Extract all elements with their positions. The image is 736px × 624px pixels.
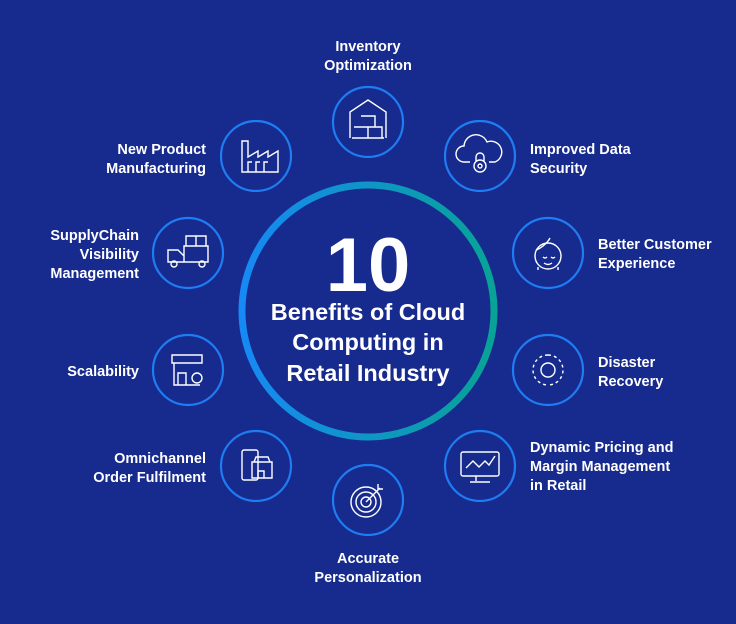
label: accurate personalization: Accurate bbox=[337, 551, 399, 567]
icon: warehouse bbox=[350, 100, 386, 138]
label: supply chain: SupplyChain bbox=[50, 228, 139, 244]
icon: target bbox=[351, 484, 383, 517]
icon circle: disaster bbox=[513, 335, 583, 405]
label: supply chain: Management bbox=[50, 266, 139, 282]
label: new product manufacturing bbox=[106, 142, 206, 177]
icon: face bbox=[535, 238, 561, 270]
title text: Benefits of Cloud bbox=[271, 299, 465, 325]
icon: store gear bbox=[172, 355, 202, 385]
icon circle: inventory bbox=[333, 87, 403, 157]
icon circle: manufacturing bbox=[221, 121, 291, 191]
icon: disaster recovery gear bbox=[533, 355, 563, 385]
label: omnichannel bbox=[93, 451, 206, 486]
label: inventory optimization: Inventory bbox=[335, 39, 401, 55]
label: accurate personalization: Personalization bbox=[314, 570, 422, 586]
label: supply chain bbox=[50, 228, 139, 282]
center ring bbox=[242, 185, 494, 437]
label: better customer experience: Experience bbox=[598, 256, 675, 272]
label: supply chain: Visibility bbox=[80, 247, 139, 263]
label: disaster recovery: Disaster bbox=[598, 355, 655, 371]
icon: monitor chart bbox=[461, 452, 499, 482]
label: dynamic pricing: Dynamic Pricing and bbox=[530, 440, 673, 456]
label: omnichannel: Order Fulfilment bbox=[93, 470, 206, 486]
label: new product manufacturing: Manufacturing bbox=[106, 161, 206, 177]
icon: factory bbox=[242, 141, 278, 172]
title text bbox=[271, 299, 465, 386]
icon circle: data security bbox=[445, 121, 515, 191]
icon circle: supply chain bbox=[153, 218, 223, 288]
title text: Computing in bbox=[292, 329, 444, 355]
label: scalability: Scalability bbox=[67, 364, 139, 380]
label: improved data security: Improved Data bbox=[530, 142, 631, 158]
label: improved data security bbox=[530, 142, 631, 177]
label: disaster recovery: Recovery bbox=[598, 374, 663, 390]
icon circle: omnichannel bbox=[221, 431, 291, 501]
label: better customer experience: Better Customer bbox=[598, 237, 712, 253]
label: inventory optimization bbox=[324, 39, 412, 74]
icon circle: pricing bbox=[445, 431, 515, 501]
icon circle: scalability bbox=[153, 335, 223, 405]
label: dynamic pricing bbox=[530, 440, 673, 494]
icon circle: personalization bbox=[333, 465, 403, 535]
label: new product manufacturing: New Product bbox=[117, 142, 206, 158]
label: inventory optimization: Optimization bbox=[324, 58, 412, 74]
label: improved data security: Security bbox=[530, 161, 587, 177]
label: disaster recovery bbox=[598, 355, 664, 390]
label: accurate personalization bbox=[314, 551, 422, 586]
icon: truck bbox=[168, 236, 208, 267]
title number: 10 bbox=[326, 223, 410, 308]
title text: Retail Industry bbox=[286, 360, 450, 386]
label: omnichannel: Omnichannel bbox=[114, 451, 206, 467]
label: dynamic pricing: Margin Management bbox=[530, 459, 670, 475]
icon: phone store bbox=[242, 450, 272, 480]
icon circle: customer bbox=[513, 218, 583, 288]
icon: cloud lock bbox=[456, 135, 502, 172]
label: better customer experience bbox=[598, 237, 712, 272]
label: dynamic pricing: in Retail bbox=[530, 478, 586, 494]
